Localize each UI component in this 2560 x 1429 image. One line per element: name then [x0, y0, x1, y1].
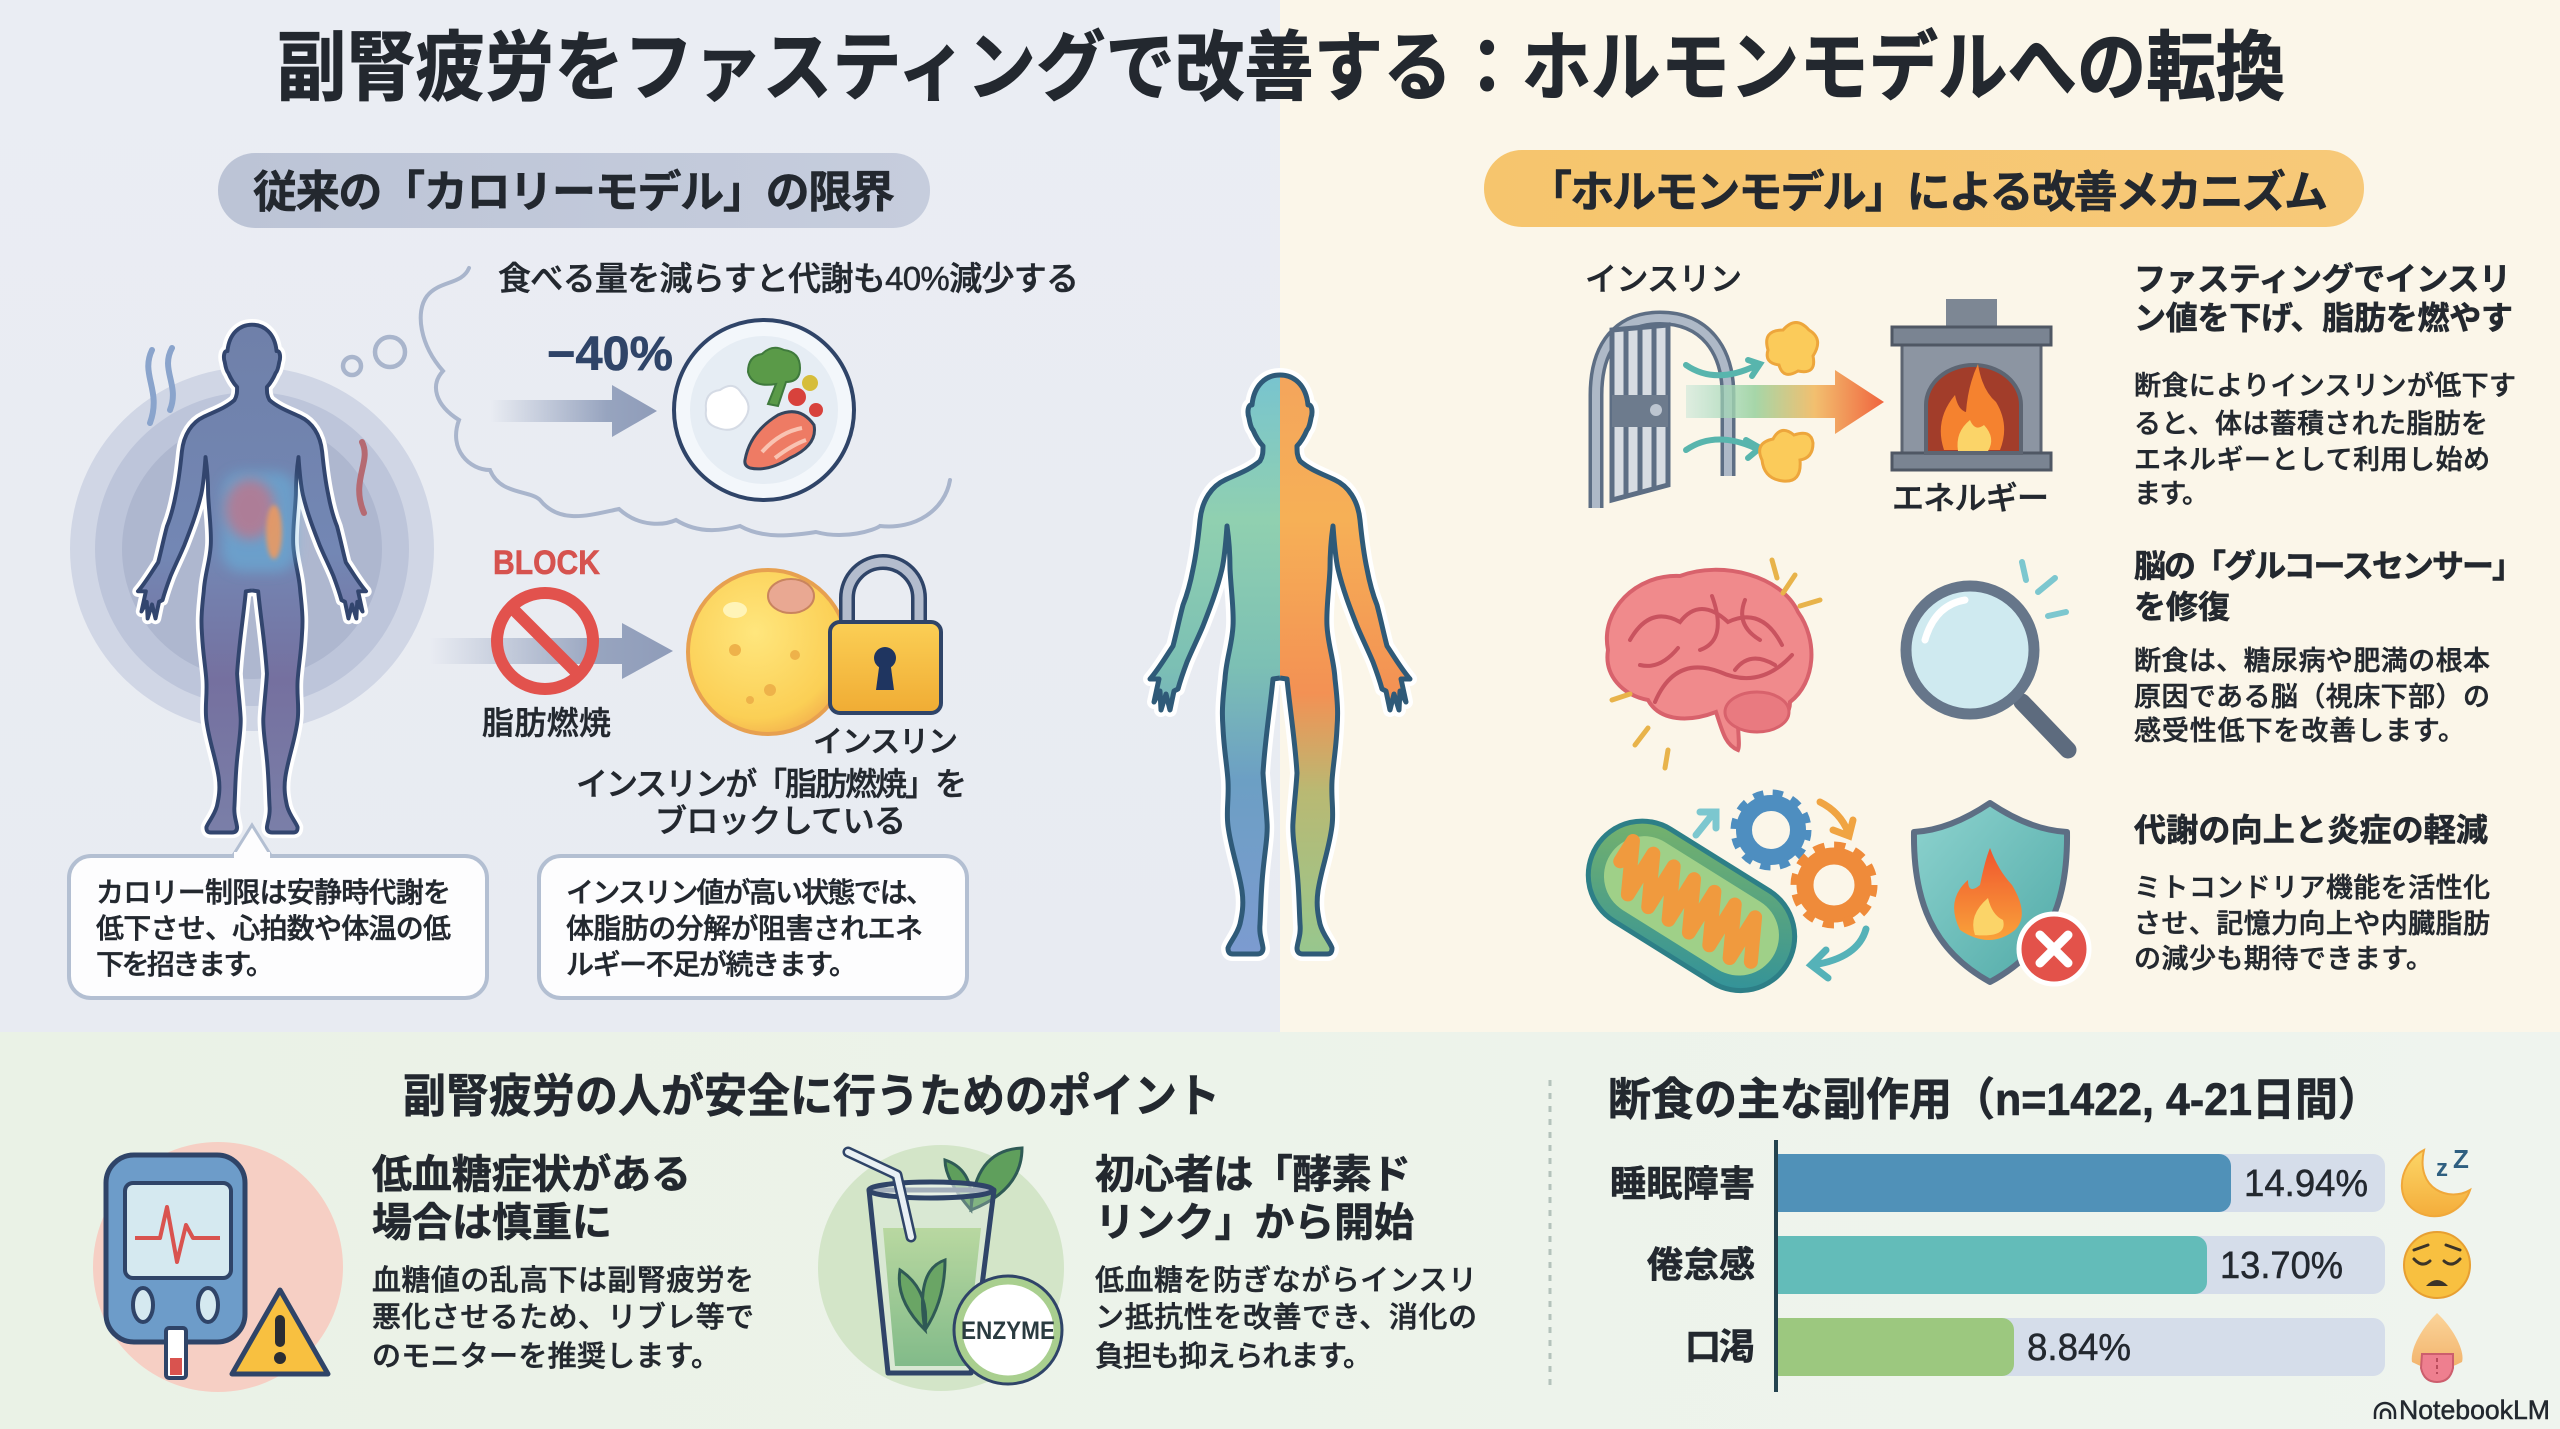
panel: calorie model: [69, 153, 1079, 998]
text block: lower insulin: ファスティングでインスリ: [2134, 261, 2511, 297]
heading: safety points: 副腎疲労の人が安全に行うためのポイント: [403, 1070, 1220, 1122]
text block: enzyme drink: 負担も抑えられます。: [1095, 1340, 1372, 1373]
text block: lower insulin: 断食によりインスリンが低下す: [2134, 371, 2516, 401]
text block: metabolism inflammation: させ、記憶力向上や内臓脂肪: [2134, 909, 2490, 939]
text block: lower insulin: ると、体は蓄積された脂肪を: [2134, 409, 2488, 439]
title: 副腎疲労をファスティングで改善する：ホルモンモデルへの転換: [277, 26, 2285, 111]
icon: enzyme drink: ENZYME: [961, 1317, 1055, 1345]
text block: metabolism inflammation: [2134, 812, 2490, 974]
callout: calorie restriction: [69, 825, 487, 998]
text block: enzyme drink: [1095, 1153, 1477, 1373]
icon: brain: [1607, 560, 1820, 768]
text block: lower insulin: [2134, 261, 2516, 509]
bar row: sleep disorder: 14.94%: [2244, 1163, 2368, 1205]
caption: insulin blocks fat burn: インスリンが「脂肪燃焼」を: [576, 766, 967, 802]
text block: brain sensor: 断食は、糖尿病や肥満の根本: [2134, 646, 2490, 676]
logo: NotebookLM: NotebookLM: [2399, 1395, 2550, 1425]
text block: brain sensor: 脳の「グルコースセンサー」: [2134, 548, 2524, 584]
figure: central body transition: [1150, 375, 1410, 954]
caption: insulin blocks fat burn: [576, 766, 967, 839]
text block: hypoglycemia: 悪化させるため、リブレ等で: [372, 1301, 754, 1334]
icon: moon: z: [2436, 1155, 2448, 1182]
text block: hypoglycemia: 血糖値の乱高下は副腎疲労を: [372, 1264, 754, 1297]
arrow: fat to energy: [1686, 370, 1884, 434]
callout: calorie restriction: 下を招きます。: [96, 949, 274, 980]
callout: insulin high: [539, 856, 967, 998]
label: -40%: −40%: [547, 328, 673, 381]
label: BLOCK: BLOCK: [493, 544, 600, 582]
text block: hypoglycemia: 低血糖症状がある: [372, 1153, 691, 1197]
text block: lower insulin: ます。: [2134, 479, 2209, 509]
caption: metabolism: 食べる量を減らすと代謝も40%減少する: [498, 260, 1079, 297]
text block: hypoglycemia: 場合は慎重に: [372, 1201, 612, 1245]
icon: fat globules: [1760, 322, 1818, 481]
heading pill: hormone model: 「ホルモンモデル」による改善メカニズム: [1528, 168, 2328, 217]
text block: lower insulin: エネルギーとして利用し始め: [2134, 445, 2490, 475]
text block: enzyme drink: リンク」から開始: [1095, 1201, 1414, 1245]
panel: safety points: [93, 1070, 1477, 1392]
icon: gears: [1696, 794, 1873, 978]
thought cloud: [343, 268, 950, 535]
icon: magnifier: [1906, 562, 2068, 750]
icon: mitochondrion: [1568, 801, 1815, 1011]
bar row: dry mouth: 8.84%: [2027, 1327, 2131, 1369]
arrow: calorie reduction: [490, 385, 657, 437]
icon: dry tongue: [2412, 1313, 2463, 1382]
background: left panel: [0, 0, 1280, 1032]
panel: side effects chart: [1608, 1074, 2470, 1392]
bar row: fatigue: 倦怠感: [1647, 1244, 1755, 1285]
icon: furnace: [1892, 299, 2051, 470]
text block: enzyme drink: ン抵抗性を改善でき、消化の: [1095, 1301, 1477, 1334]
text block: hypoglycemia: のモニターを推奨します。: [372, 1340, 720, 1373]
icon: enzyme drink: [818, 1145, 1064, 1391]
bar row: sleep disorder: 睡眠障害: [1610, 1163, 1755, 1204]
icon: small teal arrows: [1686, 360, 1760, 458]
chart axis: [1774, 1140, 1778, 1392]
icon: plate: [674, 320, 854, 500]
bar row: fatigue: 13.70%: [2220, 1245, 2343, 1287]
arrow: blocked fat burn: [430, 623, 673, 679]
text block: metabolism inflammation: 代謝の向上と炎症の軽減: [2134, 812, 2488, 848]
callout: insulin high: インスリン値が高い状態では、: [566, 877, 934, 908]
icon: open gate: [1596, 318, 1728, 508]
label: insulin at lock: インスリン: [813, 726, 958, 759]
heading: side effects: 断食の主な副作用（n=1422, 4-21日間）: [1608, 1074, 2381, 1125]
heading pill: calorie model: 従来の「カロリーモデル」の限界: [253, 168, 895, 217]
heading pill: calorie model: [218, 153, 930, 228]
panel: hormone model: [1484, 150, 2524, 1011]
text block: brain sensor: [2134, 548, 2524, 746]
text block: metabolism inflammation: の減少も期待できます。: [2134, 944, 2433, 974]
icon: glucose meter: [93, 1142, 343, 1392]
text block: brain sensor: を修復: [2134, 589, 2230, 625]
label: fat burn: 脂肪燃焼: [482, 705, 611, 741]
label: insulin: インスリン: [1585, 261, 1742, 297]
text block: lower insulin: ン値を下げ、脂肪を燃やす: [2134, 300, 2513, 336]
callout: calorie restriction: カロリー制限は安静時代謝を: [96, 877, 451, 908]
icon: shield with flame: [1914, 803, 2089, 984]
icon: moon: [2402, 1144, 2470, 1216]
icon: fat cell with lock: [688, 562, 941, 734]
text block: brain sensor: 原因である脳（視床下部）の: [2134, 682, 2490, 712]
bar row: fatigue: [1647, 1236, 2385, 1294]
icon: moon: Z: [2453, 1144, 2469, 1174]
background: right panel: [1280, 0, 2560, 1032]
icon: tired face: [2404, 1232, 2470, 1298]
text block: enzyme drink: 初心者は「酵素ド: [1095, 1153, 1411, 1197]
heading pill: hormone model: [1484, 150, 2364, 227]
bar row: dry mouth: [1685, 1318, 2385, 1376]
text block: metabolism inflammation: ミトコンドリア機能を活性化: [2134, 873, 2490, 903]
callout: insulin high: ルギー不足が続きます。: [566, 949, 857, 980]
text block: brain sensor: 感受性低下を改善します。: [2134, 716, 2465, 746]
callout: insulin high: 体脂肪の分解が阻害されエネ: [566, 913, 923, 944]
bar row: dry mouth: 口渇: [1685, 1326, 1755, 1367]
caption: insulin blocks fat burn: ブロックしている: [655, 803, 906, 839]
text block: enzyme drink: 低血糖を防ぎながらインスリ: [1095, 1264, 1477, 1297]
bar row: sleep disorder: [1610, 1154, 2385, 1212]
background: bottom panel: [0, 1032, 2560, 1429]
icon: prohibition sign: [497, 593, 593, 689]
callout: calorie restriction: 低下させ、心拍数や体温の低: [96, 913, 451, 944]
text block: hypoglycemia: [372, 1153, 754, 1373]
label: energy: エネルギー: [1892, 480, 2049, 516]
figure: fatigued body: [70, 325, 434, 832]
